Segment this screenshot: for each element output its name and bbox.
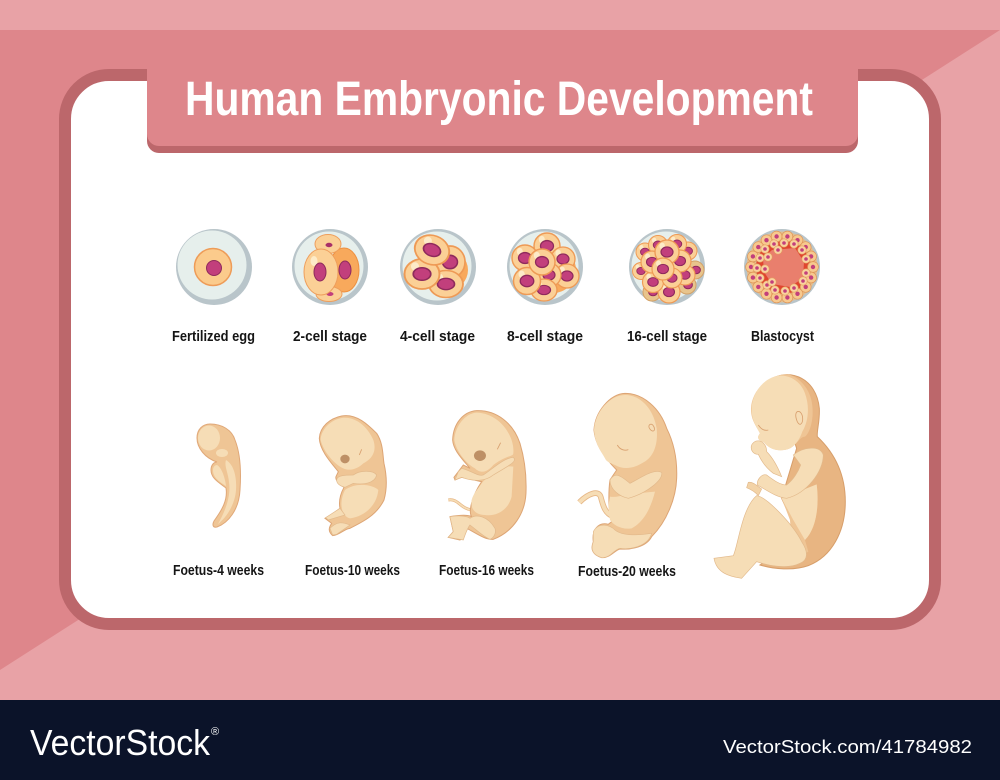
label: 8-cell: 8-cell stage [507,329,583,345]
stage: blastocyst [744,229,820,305]
stage: 2-cell [292,229,368,305]
footer url: VectorStock.com/41784982 [723,737,972,757]
panel [65,75,935,624]
label: 4-cell: 4-cell stage [400,329,475,345]
footer bar [0,700,1000,780]
registered mark: ® [211,726,219,738]
stage: 16-cell [629,229,705,305]
label: 4 weeks: Foetus-4 weeks [173,563,264,579]
label: fertilized egg: Fertilized egg [172,329,255,345]
foetus: 10 weeks [319,416,386,536]
label: 16 weeks: Foetus-16 weeks [439,563,534,579]
foetus: full term [714,374,845,578]
footer logo: VectorStock [30,722,211,763]
foetus: 16 weeks [448,411,526,540]
stage: 8-cell [507,229,583,305]
label: 16-cell: 16-cell stage [627,329,707,345]
label: 20 weeks: Foetus-20 weeks [578,564,676,580]
label: 2-cell: 2-cell stage [293,329,367,345]
foetus: 4 weeks [197,424,240,527]
label: 10 weeks: Foetus-10 weeks [305,563,400,579]
title banner [147,69,858,153]
foetus: 20 weeks [579,393,677,558]
stage: fertilized egg [176,229,252,305]
stage: 4-cell [400,229,476,305]
label: blastocyst: Blastocyst [751,329,814,345]
title: Human Embryonic Development [185,73,813,126]
